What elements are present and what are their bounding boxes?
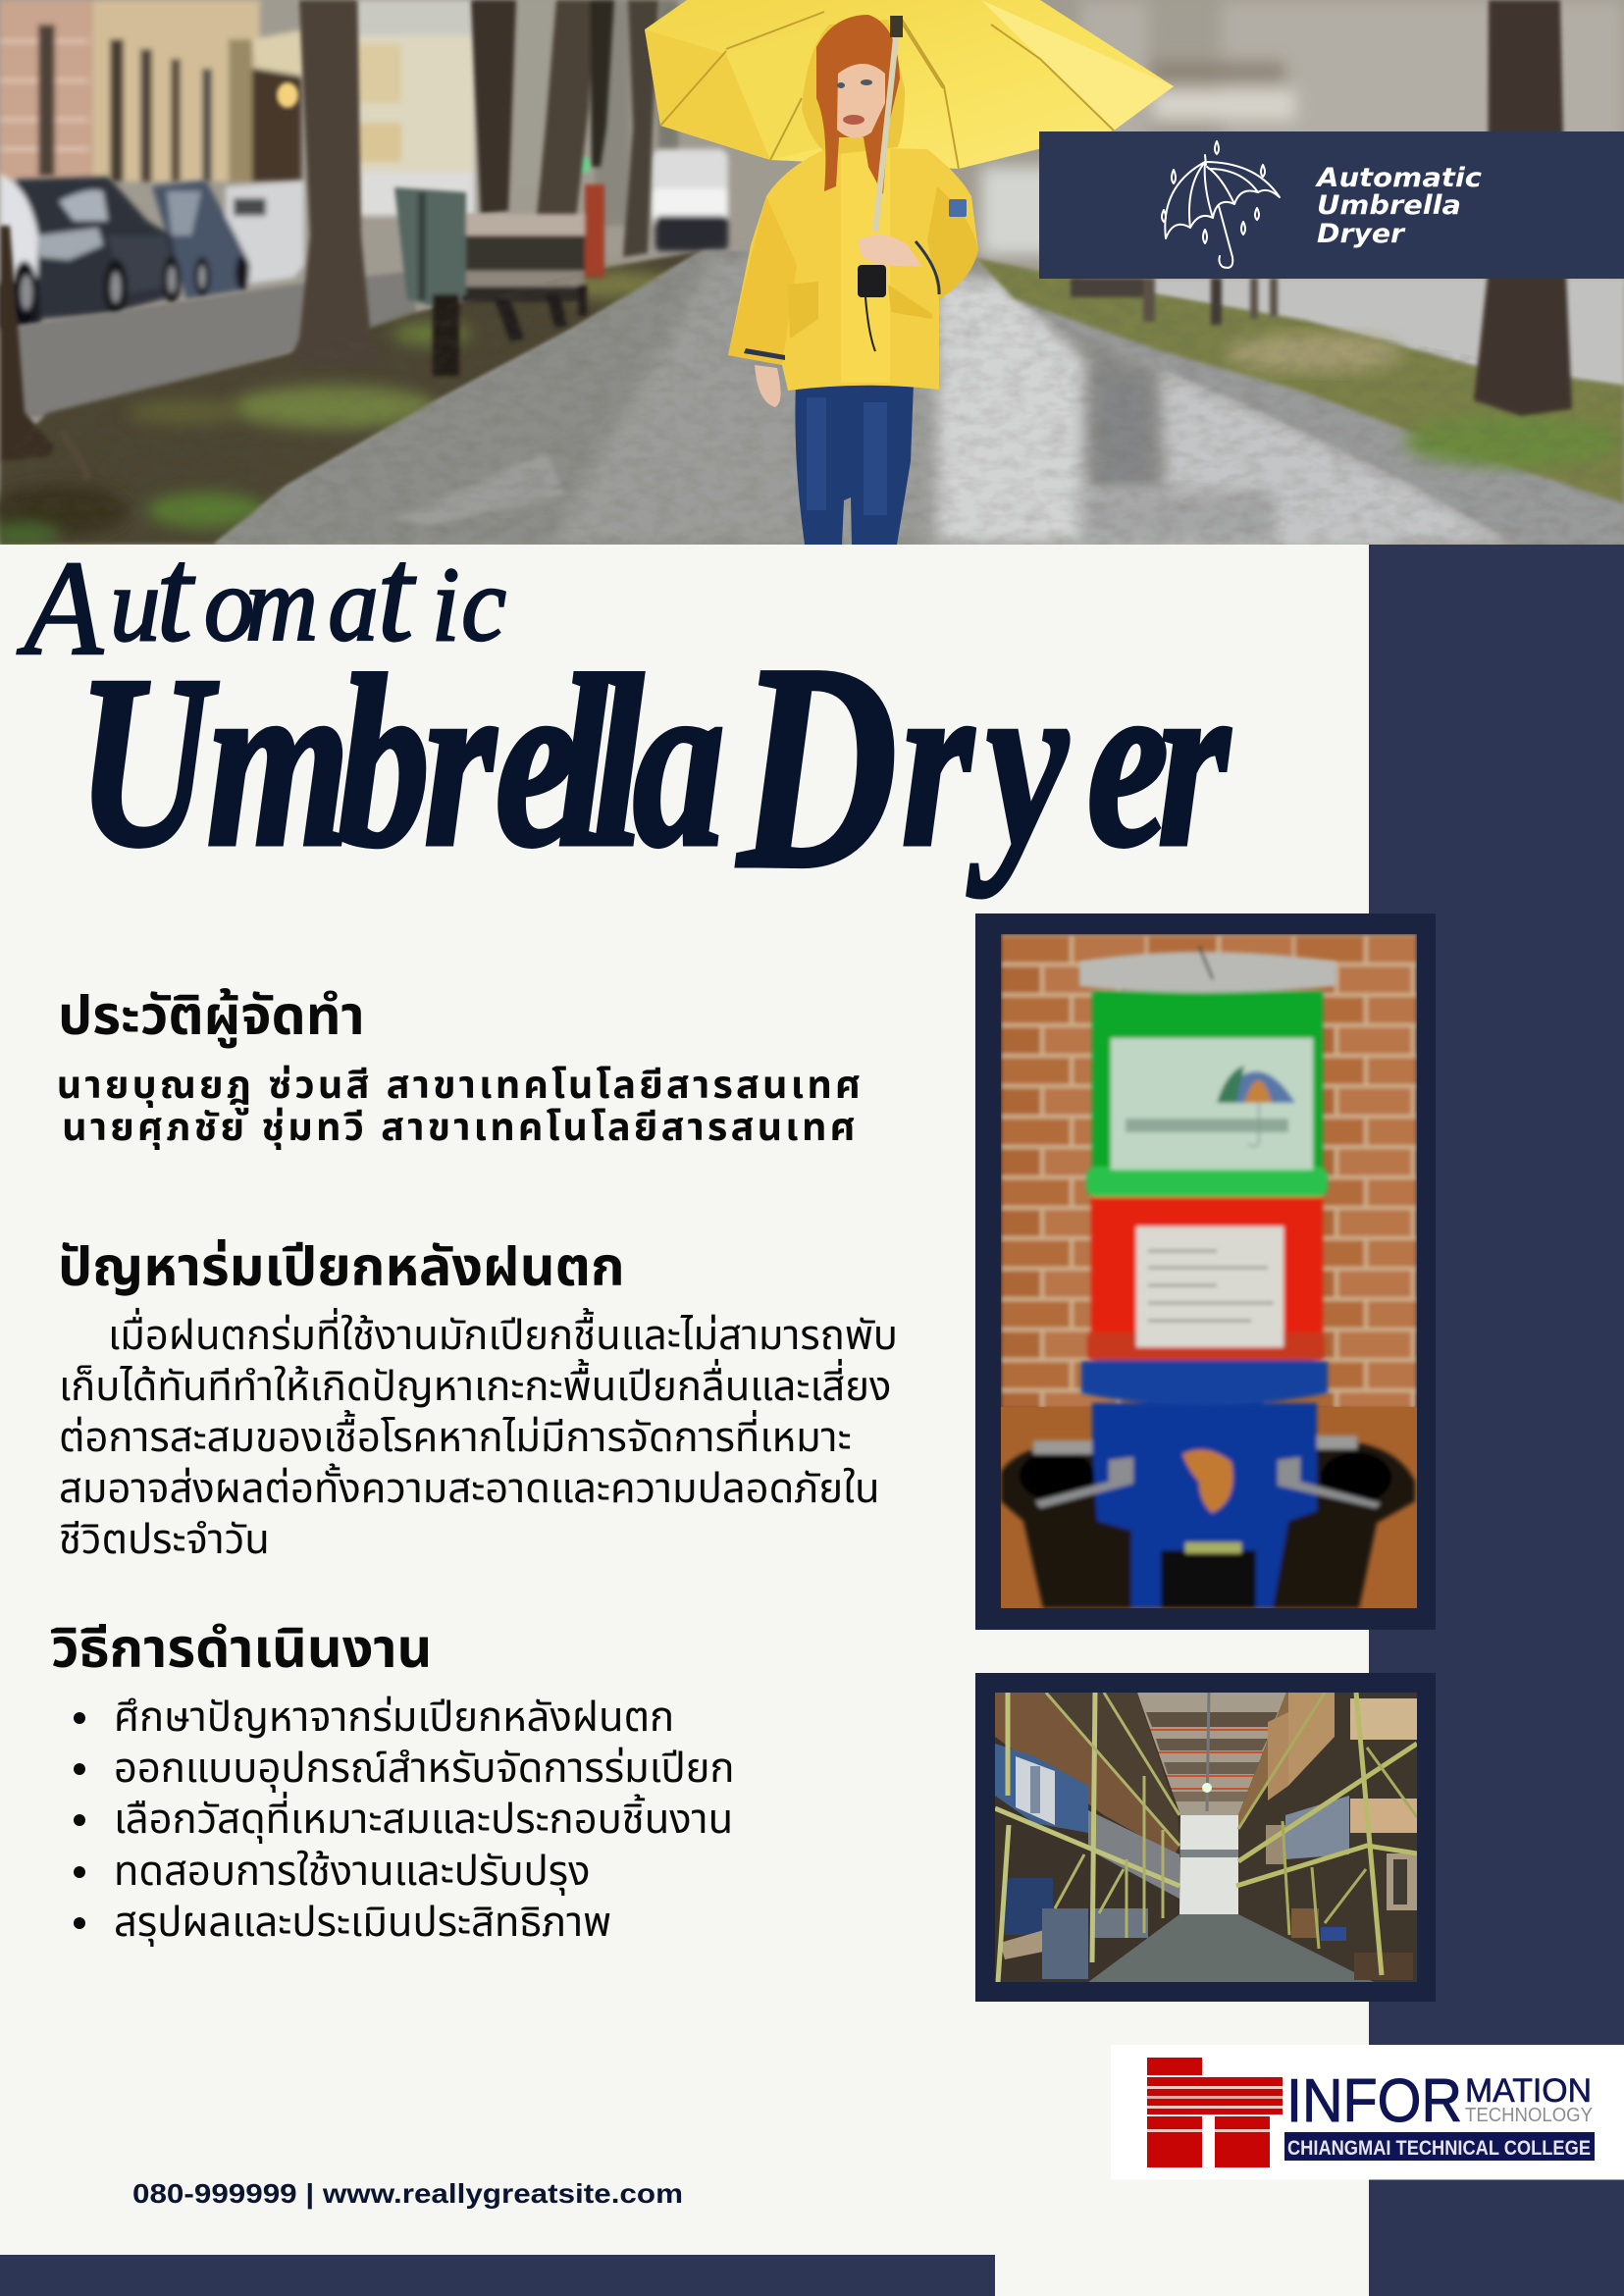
plastic handles xyxy=(1035,1457,1133,1508)
method bullet list xyxy=(74,1694,735,1947)
blue bucket xyxy=(1092,1403,1317,1608)
footprint sticker xyxy=(1182,1450,1232,1513)
green bucket xyxy=(1092,991,1323,1187)
texture on the ground xyxy=(0,245,1624,545)
heading: creators: ประวัติผู้จัดทำ xyxy=(58,985,365,1049)
silver lid xyxy=(1079,952,1336,993)
tree trunks left xyxy=(0,0,658,479)
banner text xyxy=(1315,163,1482,249)
banner text: Umbrella xyxy=(1317,190,1461,221)
logo wordmark: INFOR xyxy=(1286,2067,1462,2135)
title: Automatic: t xyxy=(157,520,196,670)
bottom navy bar xyxy=(0,2255,995,2296)
girl in yellow raincoat xyxy=(728,15,978,545)
title: Umbrella Dryer: ryer xyxy=(902,625,1231,897)
section: method xyxy=(51,1618,735,1947)
banner text: Dryer xyxy=(1317,219,1406,249)
title: Umbrella Dryer: D xyxy=(735,604,898,930)
hood xyxy=(802,20,905,155)
title: Automatic: ic xyxy=(432,546,506,663)
creator names xyxy=(57,1064,864,1150)
section: problem xyxy=(58,1236,898,1562)
right navy column xyxy=(1369,545,1624,2296)
creator names: นายศุภชัย ชุ่มทวี สาขาเทคโนโลยีสารสนเทศ xyxy=(62,1106,859,1150)
college logo xyxy=(1111,2045,1624,2180)
problem paragraph: ชีวิตประจำวัน xyxy=(59,1516,270,1562)
green traffic light xyxy=(579,155,593,176)
light spot xyxy=(277,82,298,108)
ceiling lamp xyxy=(1202,1783,1212,1793)
van xyxy=(652,149,728,251)
tree trunk right and posts xyxy=(1071,0,1572,416)
left hand xyxy=(755,365,781,407)
heading: problem: ปัญหาร่มเปียกหลังฝนตก xyxy=(58,1236,625,1297)
ceiling xyxy=(1137,1693,1286,1815)
method bullet list: สรุปผลและประเมินประสิทธิภาพ xyxy=(114,1899,611,1947)
framed photo: warehouse shelving aisle xyxy=(975,1673,1436,2002)
right grass verge xyxy=(975,258,1624,503)
problem paragraph: เมื่อฝนตกร่มที่ใช้งานมักเปียกชื้นและไม่สามารถพับ xyxy=(108,1307,898,1358)
method bullet list: เลือกวัสดุที่เหมาะสมและประกอบชิ้นงาน xyxy=(114,1791,733,1844)
umbrella shaft xyxy=(875,20,898,232)
problem paragraph: เก็บได้ทันทีทำให้เกิดปัญหาเกะกะพื้นเปียกลื่นและเสี่ยง xyxy=(59,1358,891,1409)
logo wordmark: MATION xyxy=(1465,2072,1592,2110)
banner text: Automatic xyxy=(1315,163,1482,193)
heading: method: วิธีการดำเนินงาน xyxy=(51,1618,432,1679)
method bullet list: ศึกษาปัญหาจากร่มเปียกหลังฝนตก xyxy=(114,1694,674,1740)
open yellow umbrella xyxy=(645,0,1174,169)
method bullet list: ออกแบบอุปกรณ์สำหรับจัดการร่มเปียก xyxy=(114,1745,735,1793)
street bench and bin xyxy=(394,184,604,376)
hero photo: girl with yellow umbrella in the rain xyxy=(0,0,1624,545)
title: Umbrella Dryer: Umbrella xyxy=(78,625,782,897)
product name banner xyxy=(1039,131,1624,279)
red bucket xyxy=(1091,1193,1323,1360)
problem paragraph: สมอาจส่งผลต่อทั้งความสะอาดและความปลอดภัยใน xyxy=(59,1462,880,1511)
title: Automatic: A xyxy=(17,534,104,684)
left road xyxy=(12,271,416,417)
hair xyxy=(816,15,900,194)
title: Automatic: oma xyxy=(204,546,379,663)
method bullet list: ทดสอบการใช้งานและปรับปรุง xyxy=(114,1848,591,1896)
back door xyxy=(1175,1815,1238,1914)
title: Automatic: u xyxy=(110,546,160,663)
background buildings xyxy=(0,0,678,226)
foot opening xyxy=(1161,1550,1256,1608)
logo mark: red blocks xyxy=(1147,2058,1283,2167)
creator names: นายบุณยฎู ซ่วนสี สาขาเทคโนโลยีสารสนเทศ xyxy=(57,1064,864,1116)
framed product photo: stacked coloured buckets xyxy=(975,913,1436,1630)
logo wordmark xyxy=(1284,2067,1595,2161)
footer contact: 080-999999 | www.reallygreatsite.com xyxy=(132,2178,683,2209)
wet footpath xyxy=(214,250,1624,545)
aisle floor xyxy=(1088,1914,1417,1982)
icon: umbrella with rain drops xyxy=(1162,141,1280,268)
cobbled path edge xyxy=(1015,299,1624,545)
left racks xyxy=(995,1693,1180,1982)
hand and grip xyxy=(858,235,922,267)
face xyxy=(837,64,885,138)
jeans xyxy=(795,383,914,545)
logo wordmark: TECHNOLOGY xyxy=(1465,2105,1593,2126)
problem paragraph: ต่อการสะสมของเชื้อโรคหากไม่มีการจัดการที่เหมาะ xyxy=(59,1409,852,1460)
raincoat xyxy=(728,147,978,391)
title: Automatic: t xyxy=(378,520,417,670)
right road xyxy=(1138,279,1624,386)
left grass verge xyxy=(0,250,704,545)
problem paragraph xyxy=(59,1307,898,1562)
black tubs xyxy=(1001,1440,1131,1608)
right racks xyxy=(1236,1693,1417,1982)
parked cars xyxy=(0,174,304,329)
section: creators xyxy=(57,985,864,1150)
